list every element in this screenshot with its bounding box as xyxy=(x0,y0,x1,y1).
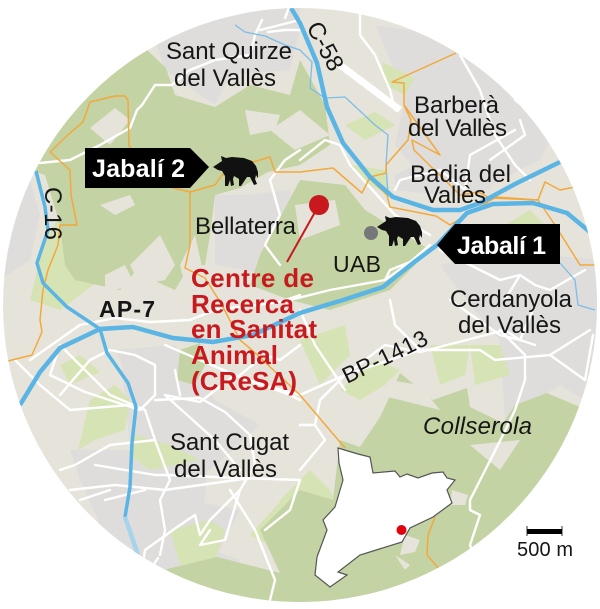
marker: UAB grey dot xyxy=(364,226,378,240)
place label: Sant Quirze del Vallès: Sant Quirze xyxy=(166,38,292,65)
tag: Jabalí 2: Jabalí 2 xyxy=(92,155,185,183)
scale bar: 500 m xyxy=(517,526,573,561)
callout: Centre de Recerca en Sanitat Animal: en Sanitat xyxy=(191,314,317,344)
scale bar: 500 m: 500 m xyxy=(517,539,573,561)
place label: Sant Cugat del Vallès: del Vallès xyxy=(174,456,277,483)
tag: Jabalí 1 xyxy=(437,224,560,264)
C-58 highway xyxy=(291,8,560,210)
place label: Badia del Vallès: Badia del xyxy=(410,161,511,188)
place label: UAB: UAB xyxy=(333,251,381,277)
hatched tunnel xyxy=(125,517,138,555)
rivers xyxy=(235,25,595,310)
callout: Centre de Recerca en Sanitat Animal: Animal xyxy=(191,340,278,370)
icon: boar 2 xyxy=(213,156,258,186)
road label: C-58: C-58 xyxy=(301,17,349,76)
place label: Cerdanyola del Vallès: Cerdanyola xyxy=(450,286,573,313)
C-16 highway xyxy=(36,171,136,517)
marker: CReSA red pin xyxy=(287,195,329,262)
place label: Bellaterra: Bellaterra xyxy=(195,213,297,240)
place label: Sant Cugat del Vallès xyxy=(170,429,289,483)
icon: boar 1 xyxy=(377,216,422,246)
callout: Centre de Recerca en Sanitat Animal: Centre de xyxy=(191,263,314,293)
road label: BP-1413: BP-1413 xyxy=(338,325,432,388)
place label: Sant Quirze del Vallès xyxy=(166,38,292,92)
AP-7 highway xyxy=(20,203,590,405)
callout: Centre de Recerca en Sanitat Animal: (CReSA) xyxy=(191,366,297,396)
place label: Badia del Vallès xyxy=(410,161,511,209)
place label: Cerdanyola del Vallès xyxy=(450,286,573,339)
light green patches xyxy=(30,62,560,565)
inset map: Catalonia xyxy=(315,448,455,587)
C-58 service road xyxy=(340,65,400,110)
place label: Cerdanyola del Vallès: del Vallès xyxy=(458,312,561,339)
road label: C-16: C-16 xyxy=(39,187,66,240)
callout: Centre de Recerca en Sanitat Animal xyxy=(191,263,317,396)
place label: Collserola: Collserola xyxy=(423,413,532,440)
place label: Barberà del Vallès: del Vallès xyxy=(408,115,507,142)
callout: Centre de Recerca en Sanitat Animal: Recerca xyxy=(191,289,295,319)
road label: AP-7: AP-7 xyxy=(99,296,155,322)
beige clearings xyxy=(90,108,520,570)
tag: Jabalí 1: Jabalí 1 xyxy=(457,232,546,260)
place label: Barberà del Vallès xyxy=(408,92,507,142)
place label: Sant Cugat del Vallès: Sant Cugat xyxy=(170,429,289,456)
place label: Sant Quirze del Vallès: del Vallès xyxy=(174,65,276,92)
place label: Barberà del Vallès: Barberà xyxy=(414,92,500,119)
tag: Jabalí 2 xyxy=(85,148,209,188)
place label: Badia del Vallès: Vallès xyxy=(424,182,486,209)
